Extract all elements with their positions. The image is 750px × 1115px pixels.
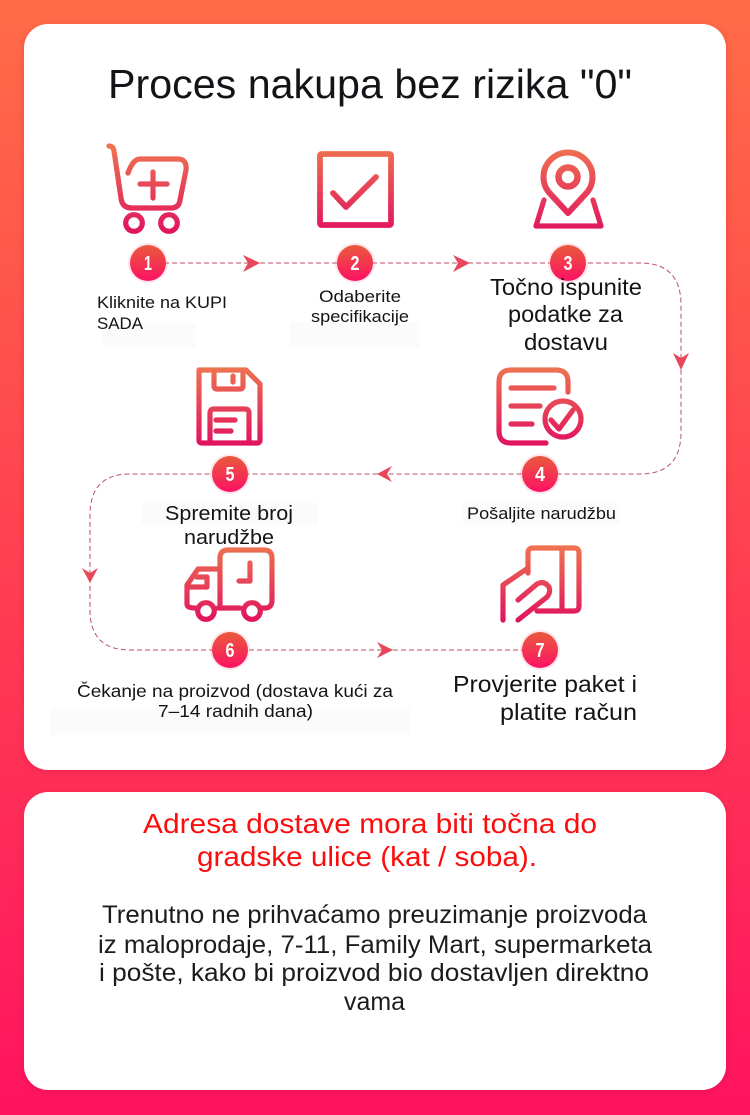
step 5 label: narudžbe — [184, 527, 274, 549]
step 7: check parcel and pay — [453, 548, 637, 725]
step 3 label: podatke za — [508, 301, 623, 327]
step 2 label: Odaberite — [319, 287, 401, 306]
icon: location pin — [536, 152, 601, 226]
red address warning: Adresa dostave mora biti točna do — [143, 808, 597, 839]
number badge 6 — [210, 630, 250, 670]
step 7 label: platite račun — [500, 699, 637, 725]
icon: document with check — [499, 370, 581, 443]
step 5 label: Spremite broj — [165, 503, 293, 525]
step 7 label: Provjerite paket i — [453, 671, 637, 697]
flow arrows — [82, 255, 689, 658]
number badge 5: 5 — [226, 464, 234, 486]
step 3: fill delivery data — [490, 152, 642, 355]
step 4 label: Pošaljite narudžbu — [467, 504, 616, 523]
pickup notice text: Trenutno ne prihvaćamo preuzimanje proizvoda — [102, 901, 647, 929]
step 3 label: dostavu — [524, 329, 608, 355]
number badge 6: 6 — [226, 640, 234, 662]
number badge 7: 7 — [536, 640, 544, 662]
number badge 4: 4 — [535, 464, 546, 486]
step 6 label: 7–14 radnih dana) — [158, 701, 313, 721]
step 1: add to cart — [97, 146, 227, 333]
pickup notice text: i pošte, kako bi proizvod bio dostavljen direktno — [99, 959, 649, 987]
red address warning: gradske ulice (kat / soba). — [197, 841, 537, 872]
number badge 3: 3 — [564, 253, 572, 275]
step 2: choose specification — [311, 154, 409, 326]
number badge 4 — [520, 454, 560, 494]
number badge 7 — [520, 630, 560, 670]
icon: cart — [109, 146, 186, 231]
icon: checkbox — [320, 154, 391, 225]
pickup notice text: vama — [344, 988, 405, 1016]
number badge 2: 2 — [350, 253, 360, 275]
step 1 label: SADA — [97, 314, 144, 333]
number badge 1: 1 — [144, 253, 152, 275]
panel: delivery notice — [24, 792, 726, 1090]
step 5: save order number — [165, 370, 293, 549]
step 3 label: Točno ispunite — [490, 274, 642, 300]
number badge 3 — [548, 243, 588, 283]
panel: purchase process — [24, 24, 726, 770]
icon: floppy disk — [199, 370, 260, 443]
pickup notice text: iz maloprodaje, 7-11, Family Mart, supermarketa — [98, 931, 652, 959]
icon: delivery truck with clock — [187, 550, 272, 619]
icon: hand holding card — [503, 548, 579, 620]
step 6 label: Čekanje na proizvod (dostava kući za — [77, 680, 393, 701]
step 2 label: specifikacije — [311, 307, 409, 326]
number badge 2 — [335, 243, 375, 283]
dashed flow line — [90, 263, 681, 650]
step 1 label: Kliknite na KUPI — [97, 293, 227, 312]
number badge 1 — [128, 243, 168, 283]
step 6: waiting for product — [77, 550, 393, 721]
step 4: send order — [467, 370, 616, 523]
title: Proces nakupa bez rizika "0" — [108, 61, 632, 107]
number badge 5 — [210, 454, 250, 494]
